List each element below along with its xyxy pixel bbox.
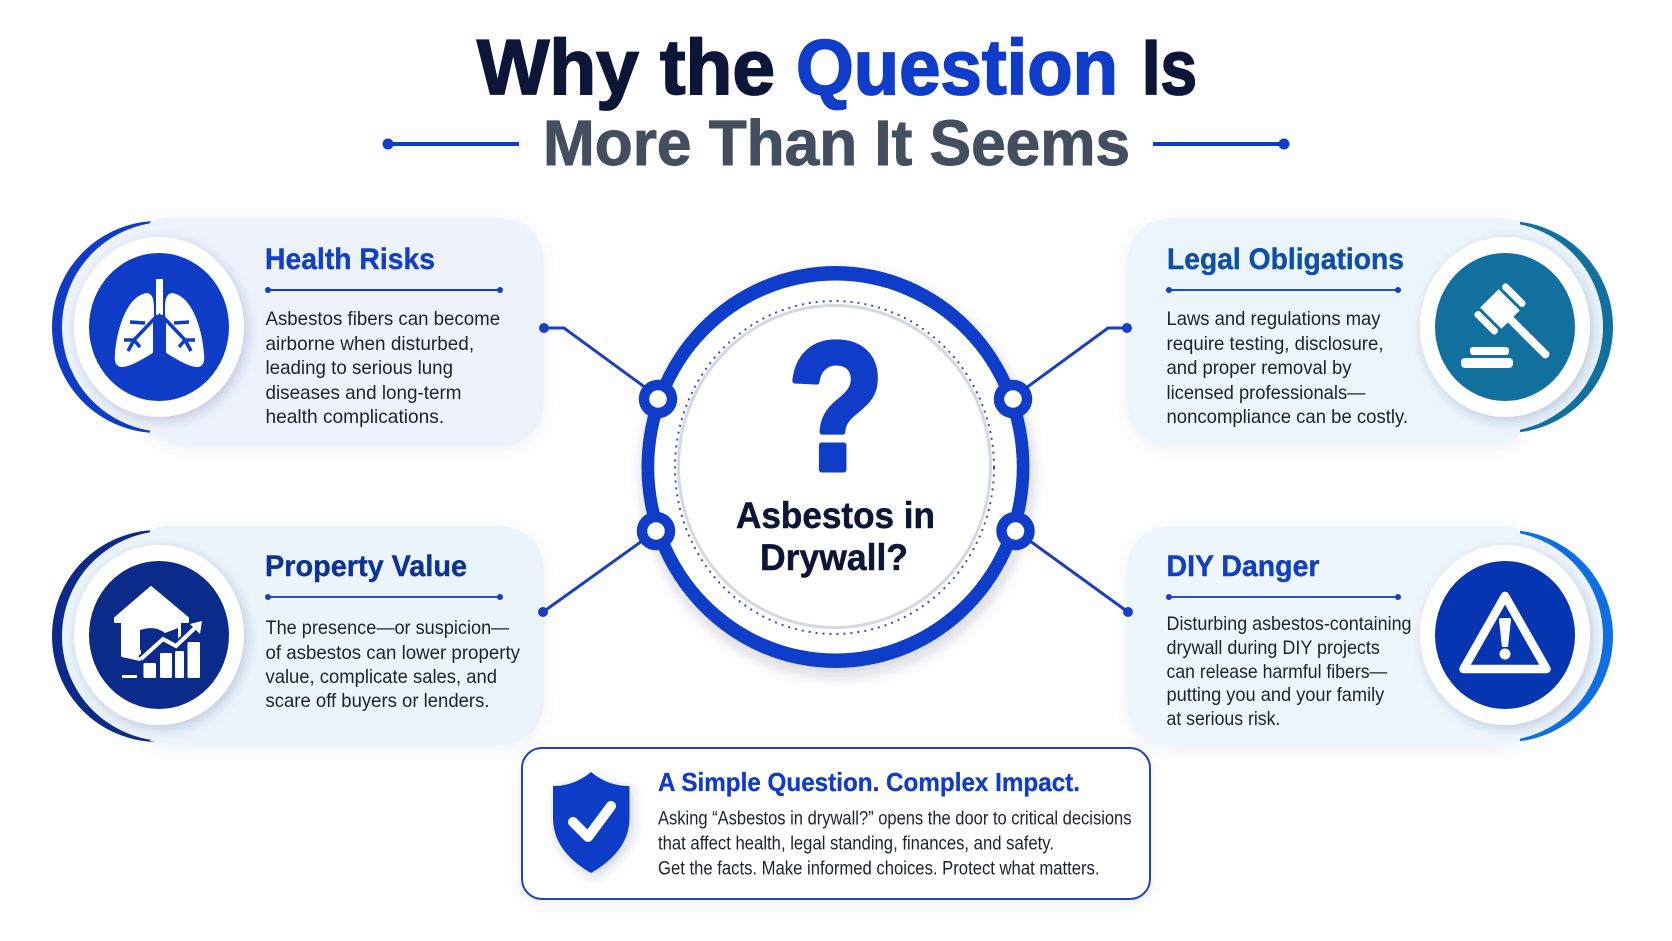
central label — [736, 495, 935, 578]
node: bottom right — [1002, 517, 1030, 545]
text: DIY danger: Disturbing asbestos-containing — [1166, 613, 1412, 635]
text: health risks: Asbestos fibers can become — [266, 308, 500, 330]
divider — [1166, 287, 1401, 293]
text: DIY danger: at serious risk. — [1166, 708, 1280, 730]
divider — [265, 287, 503, 293]
divider — [265, 594, 503, 600]
title — [477, 23, 1197, 111]
panel: property value — [52, 526, 544, 745]
text: DIY danger: drywall during DIY projects — [1166, 637, 1380, 659]
title: Question — [796, 23, 1118, 111]
central label: Asbestos in — [736, 495, 935, 536]
heading: health risks: Health Risks — [265, 243, 435, 276]
title: Is — [1142, 23, 1197, 111]
callout: simple question — [522, 748, 1150, 899]
subtitle — [382, 107, 1290, 179]
subtitle: More Than It Seems — [543, 107, 1130, 179]
central circle — [642, 266, 1030, 668]
callout text: Asking “Asbestos in drywall?” opens the door to critical decisions — [658, 808, 1132, 830]
question mark: ? — [788, 306, 884, 509]
divider — [1166, 594, 1401, 600]
text: legal obligations: licensed professionals— — [1166, 382, 1366, 404]
panel: DIY danger — [1127, 526, 1613, 746]
text: property value: scare off buyers or lenders. — [266, 690, 490, 712]
text: legal obligations — [1166, 308, 1408, 428]
text: health risks: diseases and long-term — [266, 382, 462, 404]
text: health risks: airborne when disturbed, — [266, 333, 474, 355]
text: health risks: health complications. — [266, 406, 444, 428]
heading: legal obligations: Legal Obligations — [1167, 243, 1404, 276]
text: property value — [266, 617, 520, 712]
icon: gavel — [1420, 237, 1590, 417]
callout heading: A Simple Question. Complex Impact. — [658, 767, 1080, 797]
heading: DIY danger: DIY Danger — [1166, 550, 1320, 583]
central label: Drywall? — [760, 537, 908, 578]
text: DIY danger — [1166, 613, 1412, 730]
text: legal obligations: Laws and regulations may — [1166, 308, 1381, 330]
connector lines — [540, 324, 1132, 616]
text: legal obligations: require testing, disclosure, — [1166, 333, 1384, 355]
icon: shield with check — [553, 772, 630, 873]
callout text: that affect health, legal standing, finances, and safety. — [658, 834, 1054, 854]
text: property value: of asbestos can lower property — [266, 642, 520, 664]
callout text: Get the facts. Make informed choices. Protect what matters. — [658, 858, 1100, 880]
text: DIY danger: putting you and your family — [1166, 684, 1385, 706]
text: DIY danger: can release harmful fibers— — [1166, 661, 1388, 683]
callout text — [658, 808, 1132, 880]
panel: legal obligations — [1127, 218, 1613, 446]
icon: lungs — [74, 237, 244, 417]
node: top right — [999, 385, 1027, 413]
node: bottom left — [642, 517, 670, 545]
text: property value: value, complicate sales, and — [266, 666, 497, 688]
title: Why the — [477, 23, 775, 111]
panel: health risks — [52, 218, 544, 446]
text: health risks — [266, 308, 500, 428]
text: legal obligations: noncompliance can be costly. — [1166, 406, 1408, 428]
text: legal obligations: and proper removal by — [1166, 357, 1352, 379]
text: health risks: leading to serious lung — [266, 357, 453, 379]
text: property value: The presence—or suspicion— — [266, 617, 510, 639]
icon: house with chart — [74, 545, 244, 725]
icon: warning triangle — [1420, 545, 1590, 725]
heading: property value: Property Value — [265, 550, 467, 583]
node: top left — [644, 385, 672, 413]
